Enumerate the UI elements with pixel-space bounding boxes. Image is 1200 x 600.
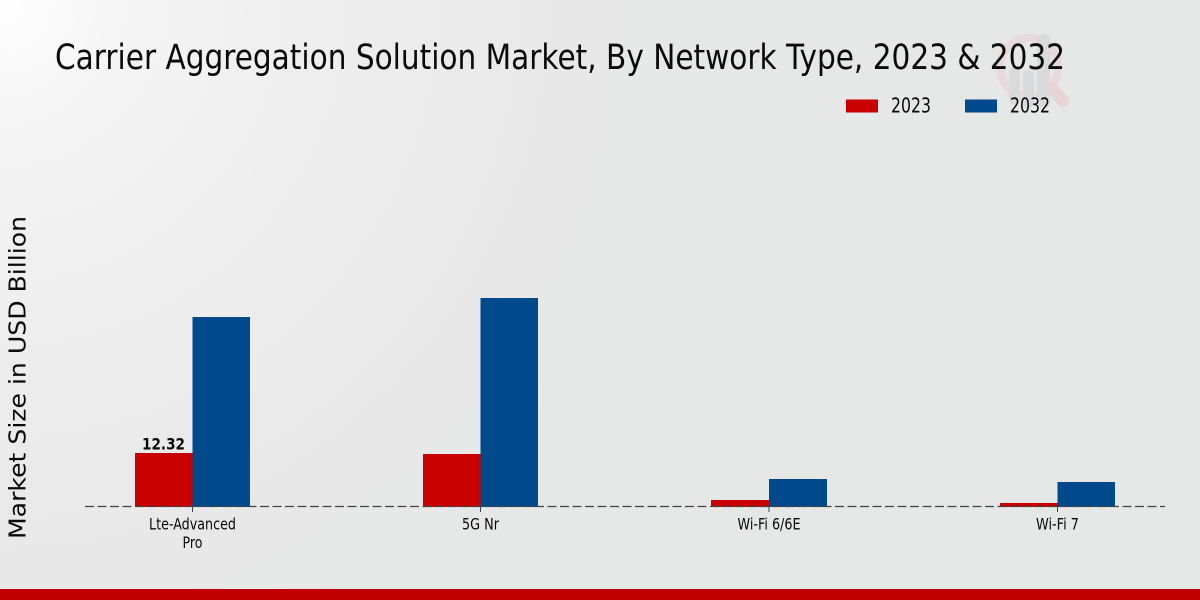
category label: Wi-Fi 7: Wi-Fi 7: [1036, 514, 1079, 534]
bars: 5G Nr: [423, 298, 538, 507]
footer bar: [0, 589, 1200, 600]
bars: Lte-Advanced Pro: [135, 317, 250, 507]
category label: Wi-Fi 6/6E: Wi-Fi 6/6E: [738, 514, 800, 534]
y axis title: Market Size in USD Billion: [4, 216, 32, 539]
bars: Wi-Fi 6/6E: [711, 479, 827, 507]
category label: 5G Nr: 5G Nr: [462, 514, 499, 534]
category label: Lte-Advanced Pro: [149, 514, 236, 552]
legend label: 2023: 2023: [891, 94, 931, 118]
baseline: [85, 506, 1165, 508]
title: Carrier Aggregation Solution Market, By Network Type, 2023 & 2032: [55, 38, 1065, 78]
category label: Lte-Advanced Pro: Pro: [182, 533, 202, 552]
data label: 12.32: [142, 434, 185, 454]
legend swatch: 2023: [846, 100, 878, 112]
bar chart: [85, 298, 1165, 552]
category label: Lte-Advanced Pro: Lte-Advanced: [149, 514, 236, 534]
legend swatch: 2032: [965, 100, 997, 112]
bars: Wi-Fi 7: [1000, 482, 1115, 507]
icon: watermark logo: [1000, 34, 1063, 108]
legend: [846, 94, 1050, 118]
legend label: 2032: 2032: [1010, 94, 1050, 118]
